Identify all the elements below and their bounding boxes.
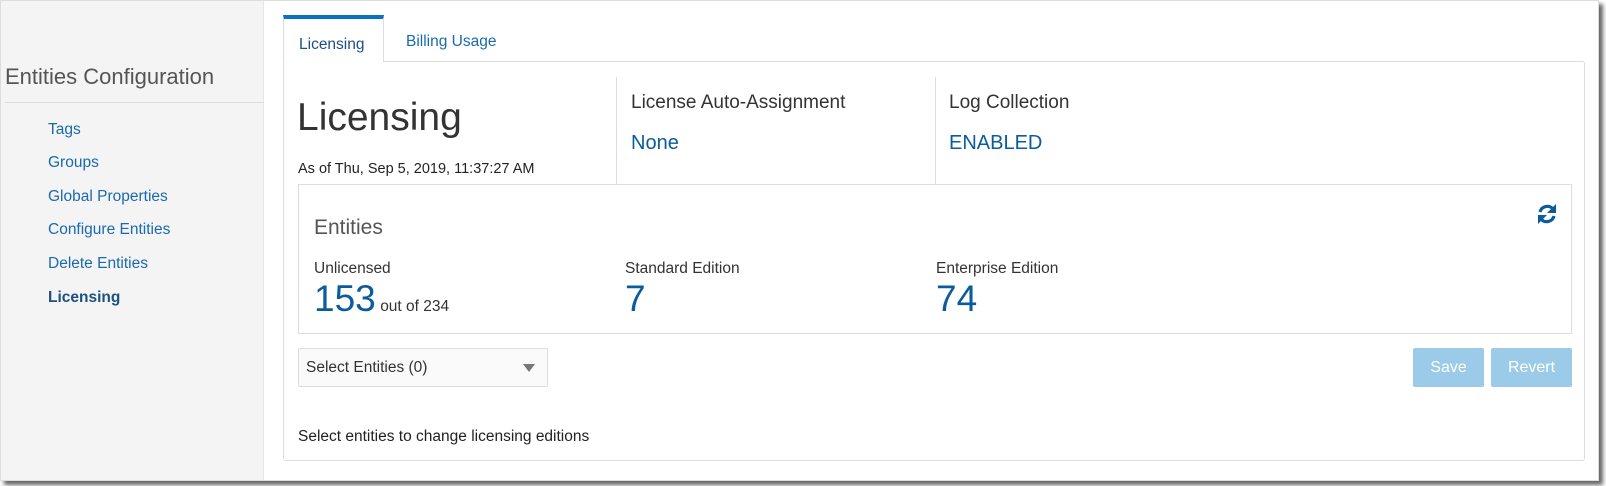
tab: Licensing (active) — [283, 15, 384, 62]
sidebar title: Entities Configuration — [5, 64, 214, 89]
stat: unlicensed: Unlicensed — [314, 260, 391, 277]
heading: Licensing: Licensing — [297, 96, 462, 139]
log collection: ENABLED — [949, 132, 1042, 154]
sidebar — [1, 1, 264, 480]
button: Revert — [1491, 348, 1572, 387]
button: Save — [1413, 348, 1484, 387]
button: Revert: Revert — [1508, 359, 1555, 376]
footer hint: Select entities to change licensing editions — [298, 428, 589, 445]
entities title: Entities — [314, 216, 383, 239]
entities box — [298, 184, 1572, 334]
log collection: Log Collection — [949, 92, 1069, 113]
license auto-assignment: None — [631, 132, 679, 154]
nav: Licensing (active): Licensing — [48, 289, 120, 306]
stat: standard edition — [625, 260, 740, 319]
icon: refresh — [1538, 204, 1556, 224]
stat: standard edition: Standard Edition — [625, 260, 740, 277]
nav: Delete Entities: Delete Entities — [48, 255, 148, 272]
stat: enterprise edition: Enterprise Edition — [936, 260, 1058, 277]
license auto-assignment — [631, 92, 846, 154]
tab: Billing Usage: Billing Usage — [406, 33, 496, 50]
stat: unlicensed — [314, 260, 449, 319]
button: Save: Save — [1430, 359, 1467, 376]
nav: Groups: Groups — [48, 154, 99, 171]
nav: Global Properties: Global Properties — [48, 188, 168, 205]
tab: Licensing (active): Licensing — [299, 36, 364, 53]
stat: unlicensed: 153 out of 234 — [314, 278, 449, 319]
stat: enterprise edition: 74 — [936, 278, 977, 319]
license auto-assignment: License Auto-Assignment — [631, 92, 845, 113]
select entities dropdown: Select Entities (0) — [306, 359, 427, 376]
timestamp: As of Thu, Sep 5, 2019, 11:37:27 AM — [298, 161, 534, 177]
select entities dropdown — [298, 348, 548, 387]
stat: standard edition: 7 — [625, 278, 646, 319]
nav: Configure Entities: Configure Entities — [48, 221, 170, 238]
log collection — [949, 92, 1069, 154]
stat: enterprise edition — [936, 260, 1058, 319]
main panel — [283, 61, 1585, 461]
nav: Tags: Tags — [48, 121, 81, 138]
